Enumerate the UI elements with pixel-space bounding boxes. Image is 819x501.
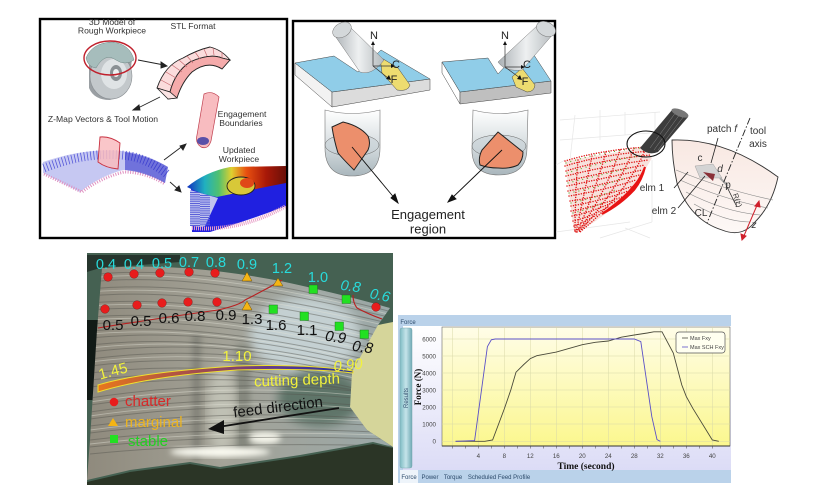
labels: cyan depth values: 0.4	[96, 257, 116, 273]
line: Max SCH Fxy	[456, 339, 660, 441]
labels: cyan depth values: 0.8	[339, 278, 362, 296]
labels: yellow depth values: 1.10	[222, 348, 252, 365]
labels: yellow depth values	[97, 348, 364, 390]
labels: cyan depth values	[96, 255, 392, 306]
y axis tick labels: 4000	[422, 370, 437, 378]
panel: chatter test photograph	[87, 253, 393, 485]
tabs	[400, 470, 531, 483]
labels: cyan depth values: 0.8	[206, 255, 226, 271]
x axis tick labels: 24	[605, 453, 612, 460]
heading: updated workpiece: Workpiece	[219, 154, 259, 164]
heading: updated workpiece: Updated	[223, 145, 255, 155]
legend: chatter, marginal, stable: stable	[128, 433, 168, 450]
label: N C F left: N	[370, 30, 378, 42]
labels: patch points and elements: z	[750, 220, 756, 231]
x axis tick labels: 32	[657, 453, 664, 460]
labels: patch points and elements	[640, 153, 756, 231]
text: engagement region: region	[410, 222, 446, 236]
arrow: model to STL	[138, 60, 167, 68]
y axis tick labels: 3000	[422, 388, 437, 394]
title: Force: Force	[400, 320, 416, 326]
x axis tick labels: 28	[631, 453, 638, 460]
x axis tick labels: 4	[477, 453, 481, 460]
legend: chatter, marginal, stable: chatter	[125, 393, 171, 410]
panel: force chart window	[398, 315, 731, 483]
axis title: Time (second): Time (second)	[557, 461, 615, 472]
label: N C F right	[501, 30, 531, 88]
icon: right ball-end tool with engagement patch	[472, 110, 528, 175]
chart area background	[403, 326, 731, 470]
icon: right tool cylinder	[498, 18, 558, 70]
markers: chatter circles	[101, 268, 380, 313]
photo: machined blade surface	[87, 255, 393, 480]
heading: 3D model of rough workpiece: 3D Model of	[89, 17, 136, 27]
icon: right yellow cut slot	[512, 68, 535, 92]
y axis tick labels	[422, 336, 437, 446]
label: patch f: patch f	[707, 124, 738, 135]
arrow: to engagement boundaries	[164, 144, 186, 160]
icon: left tool cylinder	[330, 19, 384, 73]
labels: cyan depth values: 0.6	[368, 286, 392, 306]
labels: black depth values: 1.3	[242, 311, 262, 328]
icon: right workpiece plate	[442, 50, 551, 104]
side tab: Results: Results	[404, 388, 410, 408]
legend	[676, 332, 725, 353]
x axis tick labels: 16	[553, 453, 560, 460]
labels: cyan depth values: 0.9	[237, 257, 257, 273]
chart: updated workpiece surface	[187, 166, 286, 232]
x axis tick labels: 8	[503, 453, 507, 460]
labels: cyan depth values: 0.7	[179, 255, 199, 271]
arrow: to updated workpiece	[170, 182, 181, 192]
heading: engagement boundaries: Engagement	[218, 109, 267, 119]
label: N C F right: F	[522, 76, 529, 88]
label: N C F right: C	[523, 59, 531, 71]
icon: cutter over point cloud	[627, 106, 690, 157]
tabs: Force	[401, 475, 417, 481]
window frame	[398, 315, 731, 483]
y axis tick labels: 1000	[422, 422, 437, 428]
tabs: Scheduled Feed Profile	[468, 475, 531, 481]
label: tool axis: axis	[749, 139, 767, 150]
arrows: patch leaders	[674, 138, 737, 208]
legend: Max SCH Fxy	[690, 345, 724, 351]
icon: yellow clamp	[349, 322, 393, 447]
image background	[87, 253, 393, 485]
x axis tick labels: 12	[527, 453, 534, 460]
chart: force vs time	[413, 327, 730, 472]
icon: STL mesh arc	[157, 47, 230, 99]
legend: chatter, marginal, stable	[108, 393, 183, 450]
line: Max Fxy	[456, 332, 719, 441]
labels: black depth values	[103, 307, 375, 358]
legend: Max Fxy	[690, 336, 711, 342]
labels: patch points and elements: p	[725, 180, 731, 191]
labels: black depth values: 0.9	[216, 307, 236, 324]
y axis tick labels: 6000	[422, 336, 437, 344]
labels: black depth values: 0.9	[324, 328, 348, 348]
labels: patch points and elements: elm 2	[652, 206, 677, 217]
arrow: right patch to label	[448, 150, 502, 202]
x axis tick labels: 36	[683, 453, 690, 460]
arrow: z dimension	[741, 201, 760, 240]
labels: yellow depth values: 0.90	[333, 355, 364, 375]
y axis tick labels: 0	[433, 438, 437, 446]
tabs: Torque	[444, 475, 463, 481]
heading: engagement boundaries: Boundaries	[219, 118, 263, 128]
labels: black depth values: 0.5	[131, 313, 151, 330]
labels: black depth values: 1.6	[266, 317, 286, 334]
y axis tick labels: 2000	[422, 404, 437, 412]
arrow: left patch to label	[352, 147, 398, 203]
icon: left yellow cut slot	[380, 57, 410, 90]
y axis tick labels: 5000	[422, 354, 437, 360]
heading: 3D model of rough workpiece: Rough Workpiece	[78, 26, 146, 36]
x axis tick labels: 20	[579, 453, 586, 460]
label: N C F left	[370, 30, 400, 86]
chart: toolpath point cloud	[565, 147, 652, 233]
labels: patch points and elements: CL	[695, 208, 708, 219]
line: chatter boundary curve	[98, 280, 282, 328]
labels: patch points and elements: elm 1	[640, 183, 665, 194]
label: N C F left: C	[392, 59, 400, 71]
markers: marginal triangles	[242, 272, 283, 310]
labels: patch points and elements: d	[717, 164, 723, 175]
labels: black depth values: 0.6	[159, 310, 179, 327]
arrow: STL to Z-map	[133, 97, 160, 110]
markers: stable squares	[269, 285, 368, 338]
x axis tick labels: 40	[709, 453, 716, 460]
axis title: Force (N): Force (N)	[413, 369, 423, 405]
labels: cyan depth values: 0.4	[124, 257, 144, 273]
heading: Z-map vectors and tool motion: Z-Map Vectors & Tool Motion	[48, 114, 158, 124]
arrow: feed direction: feed direction	[232, 394, 324, 421]
labels: cyan depth values: 1.2	[272, 261, 292, 277]
label: tool axis: tool	[750, 126, 766, 137]
labels: black depth values: 0.5	[103, 317, 123, 334]
labels: patch points and elements: R(z)	[731, 192, 744, 209]
label: N C F right: N	[501, 30, 509, 42]
chart: cutting depth band	[98, 366, 353, 392]
label: N C F left: F	[391, 74, 398, 86]
chart: Z-map vector field with tool	[43, 137, 168, 192]
side tab: Results	[400, 328, 412, 468]
x axis tick labels	[477, 453, 716, 460]
line: chatter boundary right	[353, 295, 382, 319]
labels: black depth values: 0.8	[185, 308, 205, 325]
labels: yellow depth values: cutting depth	[254, 371, 340, 390]
labels: black depth values: 1.1	[297, 322, 317, 339]
labels: cyan depth values: 0.5	[152, 256, 172, 272]
labels: yellow depth values: 1.45	[97, 359, 129, 383]
tabs: Power	[421, 475, 439, 481]
chart: ball end hemisphere model	[672, 118, 778, 233]
labels: black depth values: 0.8	[351, 338, 375, 358]
panel: tool patch model	[556, 106, 778, 240]
labels: cyan depth values: 1.0	[308, 270, 328, 286]
legend: chatter, marginal, stable: marginal	[125, 414, 183, 431]
icon: tool with engagement boundary	[196, 93, 219, 148]
panel: engagement region diagrams	[293, 18, 558, 238]
arrow: feed direction	[208, 394, 339, 434]
icon: left workpiece plate	[295, 50, 430, 107]
text: engagement region: Engagement	[391, 207, 465, 222]
icon: left ball-end tool with engagement patch	[325, 110, 380, 176]
heading: STL format: STL Format	[170, 21, 216, 31]
labels: patch points and elements: c	[698, 153, 702, 164]
icon: rough workpiece wheel	[84, 41, 136, 100]
panel: machining simulation workflow	[40, 17, 287, 238]
